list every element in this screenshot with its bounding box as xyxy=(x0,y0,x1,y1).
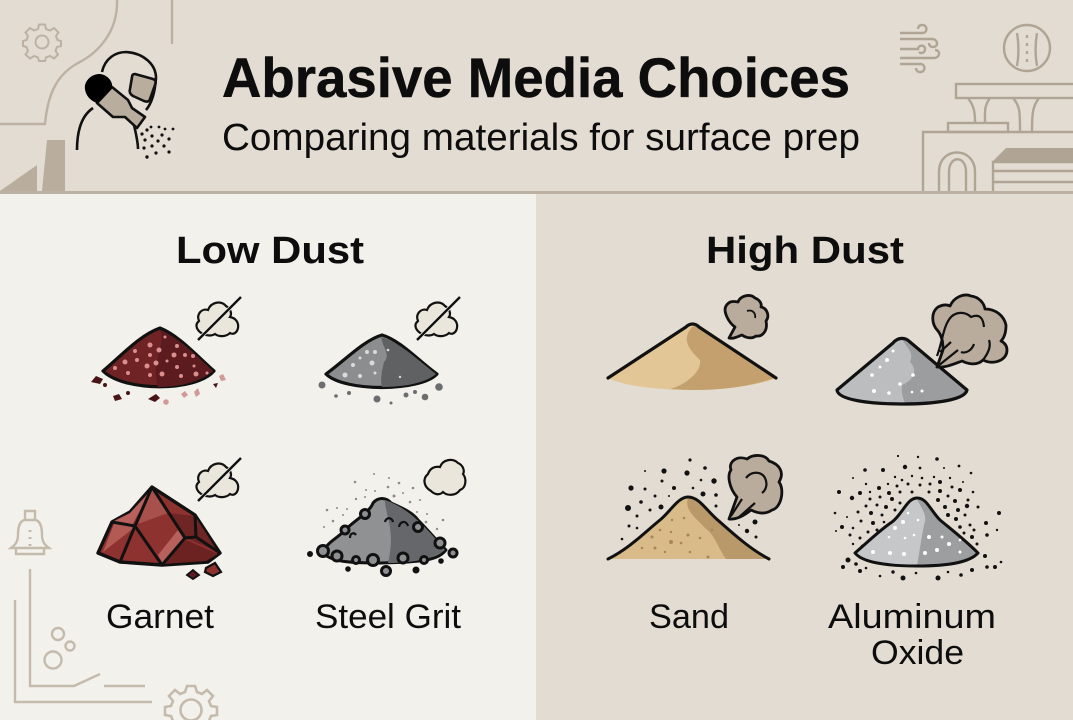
label: garnet: Garnet xyxy=(106,598,215,636)
item: garnet powder pile xyxy=(91,328,226,405)
item: steel grit pile xyxy=(307,473,457,576)
label: steel grit: Steel Grit xyxy=(315,598,462,636)
heading: low dust: Low Dust xyxy=(176,230,364,272)
subtitle: Comparing materials for surface prep xyxy=(222,117,860,159)
icon: no dust cloud (garnet crystal) xyxy=(196,458,241,501)
decorative lower-left icons xyxy=(11,511,217,720)
decorative right building and icons xyxy=(900,25,1073,191)
item: garnet crystal xyxy=(98,487,221,579)
item: aluminum oxide cone xyxy=(837,338,967,404)
heading: high dust: High Dust xyxy=(706,230,904,272)
icon: large dust cloud (aluminum oxide) xyxy=(933,295,1007,367)
title: Abrasive Media Choices xyxy=(222,46,850,109)
icon: dust cloud (sand with dust) xyxy=(729,455,782,519)
item: aluminum oxide pile with dust xyxy=(834,455,1002,580)
icon: light dust cloud xyxy=(424,460,465,495)
icon: no dust cloud (steel powder) xyxy=(415,297,460,340)
icon: sandblaster with helmet xyxy=(77,52,174,159)
label: oxide: Oxide xyxy=(871,634,964,672)
panel: header xyxy=(0,0,1073,194)
item: steel grit powder pile xyxy=(318,335,443,404)
panel: high dust background xyxy=(536,194,1073,720)
label: sand: Sand xyxy=(649,598,729,636)
icon: dust cloud (sand) xyxy=(725,295,768,338)
icon: no dust cloud (garnet powder) xyxy=(196,297,241,340)
item: sand pile with dust xyxy=(608,458,769,559)
item: sand pile xyxy=(608,324,776,390)
label: aluminum: Aluminum xyxy=(828,598,996,636)
decorative left circuit lines and gear xyxy=(0,0,172,124)
